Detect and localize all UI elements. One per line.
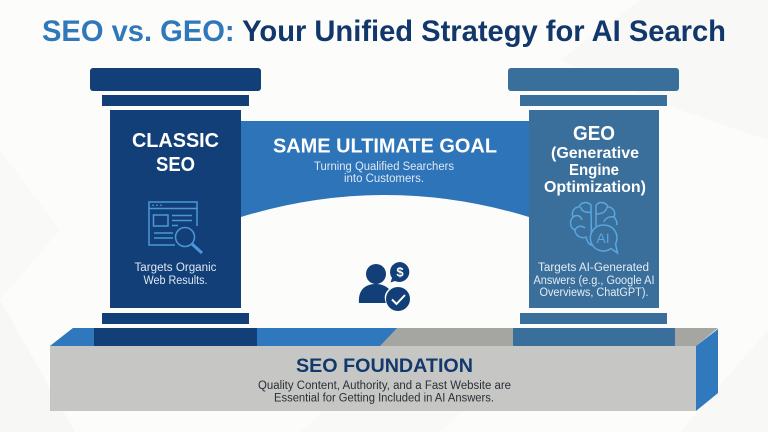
foundation description: Essential for Getting Included in AI Answers. — [274, 392, 494, 404]
column heading: (Generative — [551, 145, 639, 162]
column heading: GEO — [573, 123, 615, 145]
capital — [90, 68, 261, 106]
column description: Web Results. — [144, 275, 208, 287]
pillar: GEO — [508, 68, 679, 346]
column shaft — [529, 110, 659, 308]
capital — [508, 68, 679, 106]
icon: customer with dollar and check — [359, 262, 410, 311]
icon: web page with magnifier — [149, 202, 202, 253]
column heading: SEO — [156, 154, 195, 176]
column shaft — [110, 110, 241, 308]
banner: same ultimate goal — [241, 121, 529, 217]
column description: Answers (e.g., Google AI — [534, 275, 654, 287]
panel: foundation slab — [50, 328, 718, 411]
column description: Overviews, ChatGPT). — [540, 287, 648, 299]
column description: Targets Organic — [134, 262, 217, 274]
banner text: into Customers. — [344, 173, 424, 185]
slab side face — [696, 329, 718, 411]
foundation description — [258, 380, 511, 404]
column description: Targets AI-Generated — [538, 262, 649, 274]
base plates — [513, 313, 675, 346]
banner heading: SAME ULTIMATE GOAL — [273, 136, 497, 158]
banner text: Turning Qualified Searchers — [314, 161, 454, 173]
column heading — [544, 123, 646, 196]
title: SEO vs. GEO: Your Unified Strategy for AI Search — [42, 15, 726, 48]
column heading — [132, 130, 219, 176]
icon: brain with AI bubble: AI — [596, 230, 610, 246]
slab top surface — [50, 328, 718, 346]
slab front face — [50, 346, 696, 411]
column heading: CLASSIC — [132, 130, 219, 152]
pillar: classic SEO — [90, 68, 261, 346]
banner text — [314, 161, 454, 185]
foundation description: Quality Content, Authority, and a Fast Website are — [258, 380, 511, 392]
icon: brain with AI bubble — [571, 203, 618, 253]
column description — [134, 262, 217, 287]
base plates — [94, 313, 257, 346]
column heading: Optimization) — [544, 179, 646, 196]
icon: customer with dollar and check: $ — [396, 264, 404, 280]
column description — [534, 262, 654, 299]
column heading: Engine — [569, 162, 619, 179]
foundation heading: SEO FOUNDATION — [296, 355, 473, 377]
